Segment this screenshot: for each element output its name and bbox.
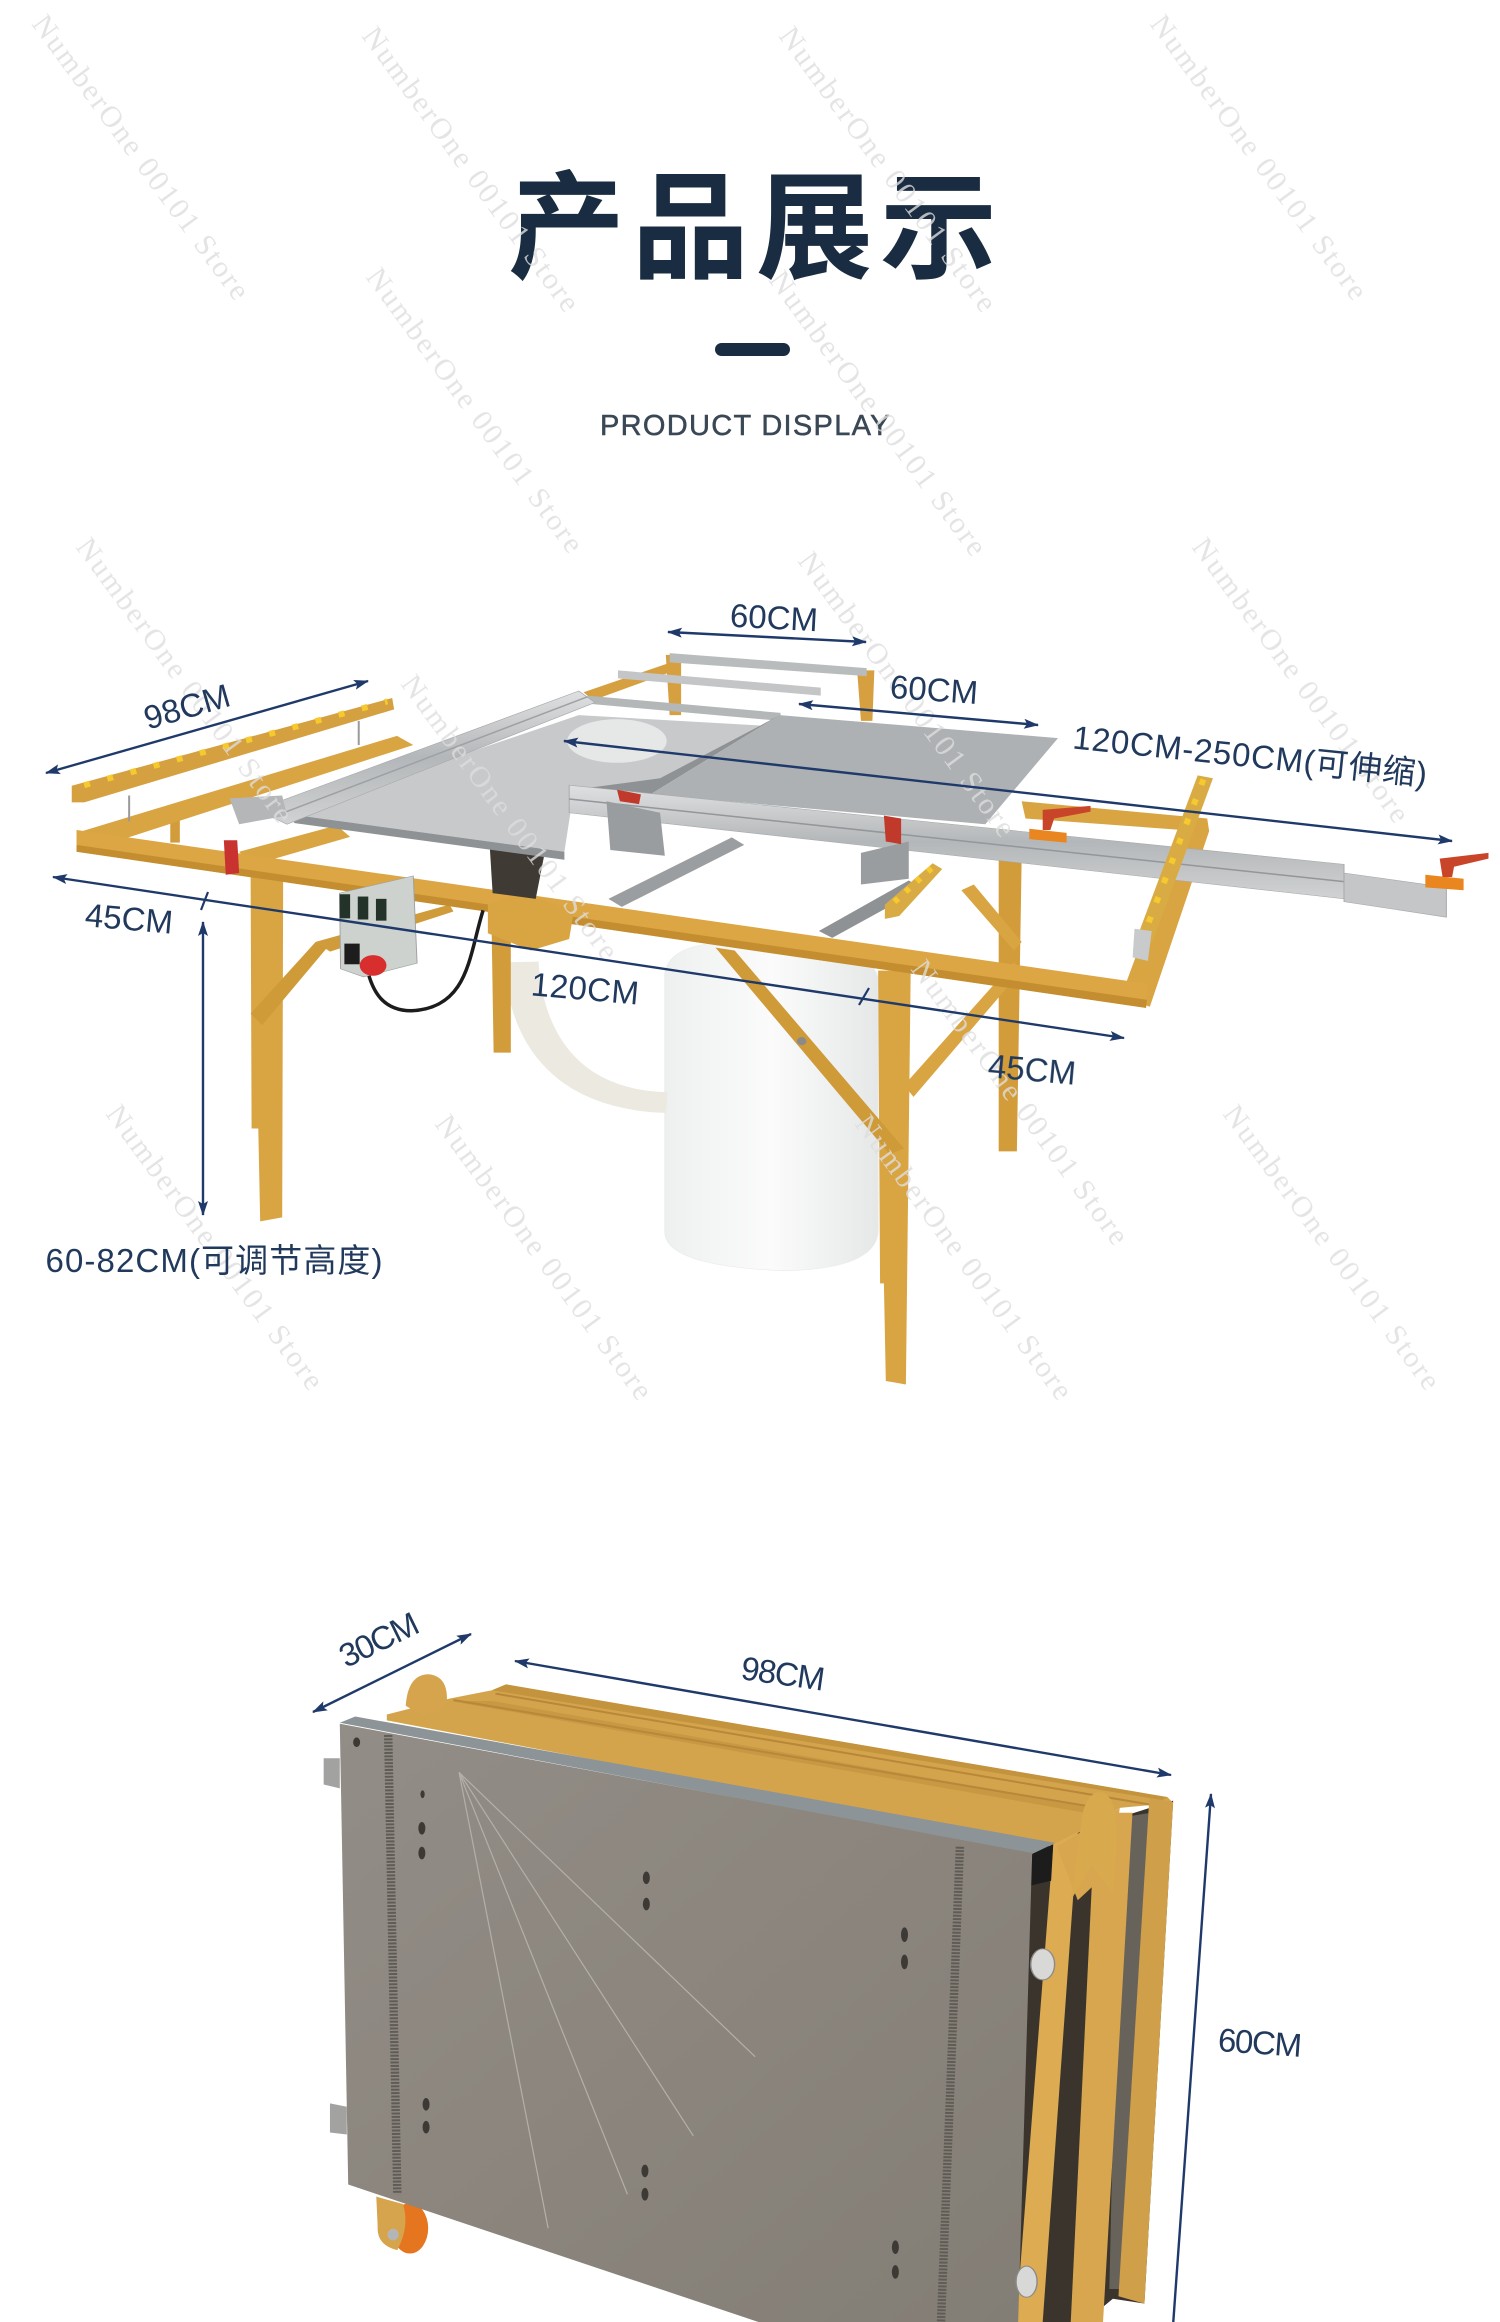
dimension: adjustable height: 60-82CM(可调节高度) [46, 1242, 382, 1279]
front legs and braces [251, 876, 911, 1384]
watermarks: NumberOne 00101 Store [762, 265, 993, 562]
dimension: 98CM folded length: 98CM [739, 1649, 827, 1698]
steel edge strip [340, 1716, 1055, 1854]
right sliding rail [569, 785, 1446, 917]
dimension: 60CM folded height: 60CM [1217, 2021, 1303, 2064]
watermarks: NumberOne 00101 Store [848, 1109, 1079, 1406]
product photo: folded table [324, 1674, 1173, 2322]
title: 产品展示 [508, 163, 1004, 294]
watermarks: NumberOne 00101 Store [1216, 1099, 1447, 1396]
dimension: 98CM fence length: 98CM [139, 677, 234, 736]
dimension: 30CM folded thickness: 30CM [333, 1605, 425, 1675]
watermarks: NumberOne 00101 Store [394, 669, 625, 966]
back roller frame [584, 653, 874, 721]
rear legs [170, 818, 1022, 1151]
watermarks: NumberOne 00101 Store [772, 21, 1003, 318]
side and end frame [77, 736, 1209, 1097]
watermarks: NumberOne 00101 Store [428, 1109, 659, 1406]
dimension: frame length with 45CM, 120CM, 45CM segments [53, 877, 1124, 1092]
right fence with yellow stops [1133, 775, 1213, 961]
subtitle: PRODUCT DISPLAY [600, 410, 891, 442]
dust collection bag [665, 942, 878, 1271]
rail clamps [224, 790, 909, 884]
plate scale strips [388, 1735, 960, 2322]
watermarks: NumberOne 00101 Store [1143, 9, 1374, 306]
dimension: 120CM-250CM telescopic [564, 718, 1452, 841]
dust hose [521, 962, 667, 1103]
power cable [368, 910, 483, 1011]
dimension: 60CM table depth [799, 668, 1038, 725]
dimension: 60CM folded height [1172, 1794, 1303, 2322]
watermarks: NumberOne 00101 Store [791, 546, 1022, 843]
rear fence with yellow stops [72, 698, 394, 821]
engraved angle lines [459, 1772, 755, 2228]
control box [340, 876, 417, 977]
plate mounting holes [353, 1737, 908, 2279]
watermarks: NumberOne 00101 Store [69, 532, 300, 829]
dimension: frame length with 45CM, 120CM, 45CM segments: 45CM [84, 896, 174, 941]
dimension: 98CM folded length [515, 1649, 1171, 1775]
dimension: 30CM folded thickness [313, 1605, 471, 1712]
black end cap [1030, 1844, 1053, 1886]
watermarks: NumberOne 00101 Store [904, 954, 1135, 1251]
dimension: frame length with 45CM, 120CM, 45CM segments: 45CM [987, 1047, 1077, 1092]
watermarks: NumberOne 00101 Store [25, 9, 256, 306]
caster wheel [376, 2197, 428, 2254]
front frame rail [77, 830, 1148, 1008]
dimension: 60CM table depth: 60CM [889, 668, 979, 711]
watermarks: NumberOne 00101 Store [99, 1099, 330, 1396]
dimension: 60CM back width [668, 597, 866, 642]
dimension: 60CM back width: 60CM [729, 597, 819, 638]
table top panels [287, 715, 1058, 860]
hinge plates [406, 1674, 1117, 1900]
side bolts [1016, 1949, 1055, 2297]
title divider bar [715, 343, 790, 356]
orange stop levers [1029, 806, 1488, 890]
motor housing under table [490, 847, 545, 899]
watermarks [25, 9, 1447, 1406]
watermarks: NumberOne 00101 Store [1185, 532, 1416, 829]
mounting brackets [324, 1758, 347, 2134]
steel table plate [340, 1724, 1032, 2322]
dimension: 98CM fence length [46, 677, 368, 773]
dimension: frame length with 45CM, 120CM, 45CM segments: 120CM [530, 965, 640, 1012]
product photo: unfolded sliding table saw [72, 653, 1488, 1384]
middle fence stop [885, 863, 942, 919]
dimension: 120CM-250CM telescopic: 120CM-250CM(可伸缩) [1071, 718, 1429, 793]
watermarks: NumberOne 00101 Store [355, 21, 586, 318]
folded gold frames behind plate [387, 1684, 1173, 2322]
under rails [608, 837, 922, 938]
watermarks: NumberOne 00101 Store [359, 262, 590, 559]
left sliding rail [256, 691, 595, 824]
